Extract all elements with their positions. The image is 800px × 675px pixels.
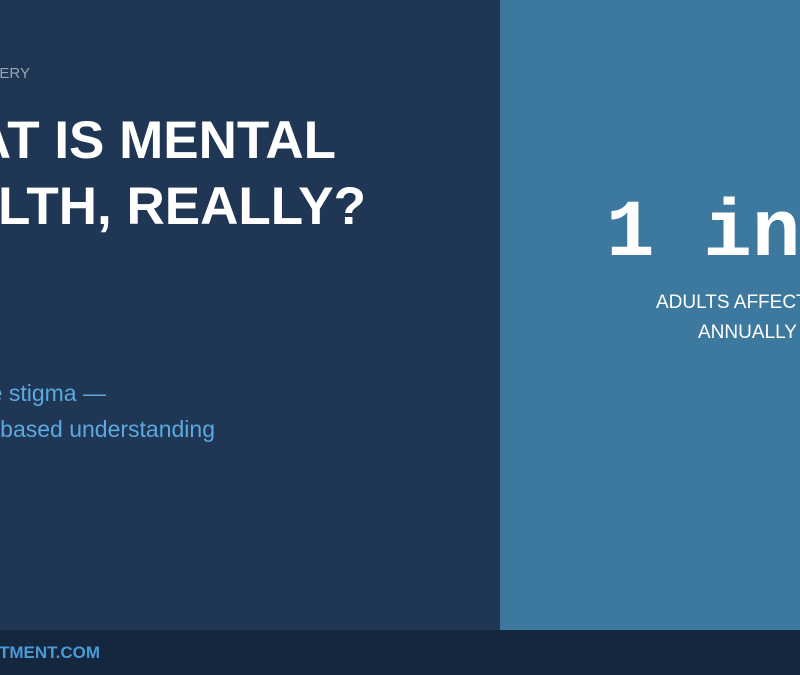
subtitle xyxy=(0,380,215,442)
panel: right stat xyxy=(500,0,800,630)
stat caption: ANNUALLY xyxy=(698,322,797,343)
stat caption xyxy=(656,292,800,343)
panel: left dark xyxy=(0,0,500,630)
footer xyxy=(0,630,800,675)
title xyxy=(0,111,366,236)
